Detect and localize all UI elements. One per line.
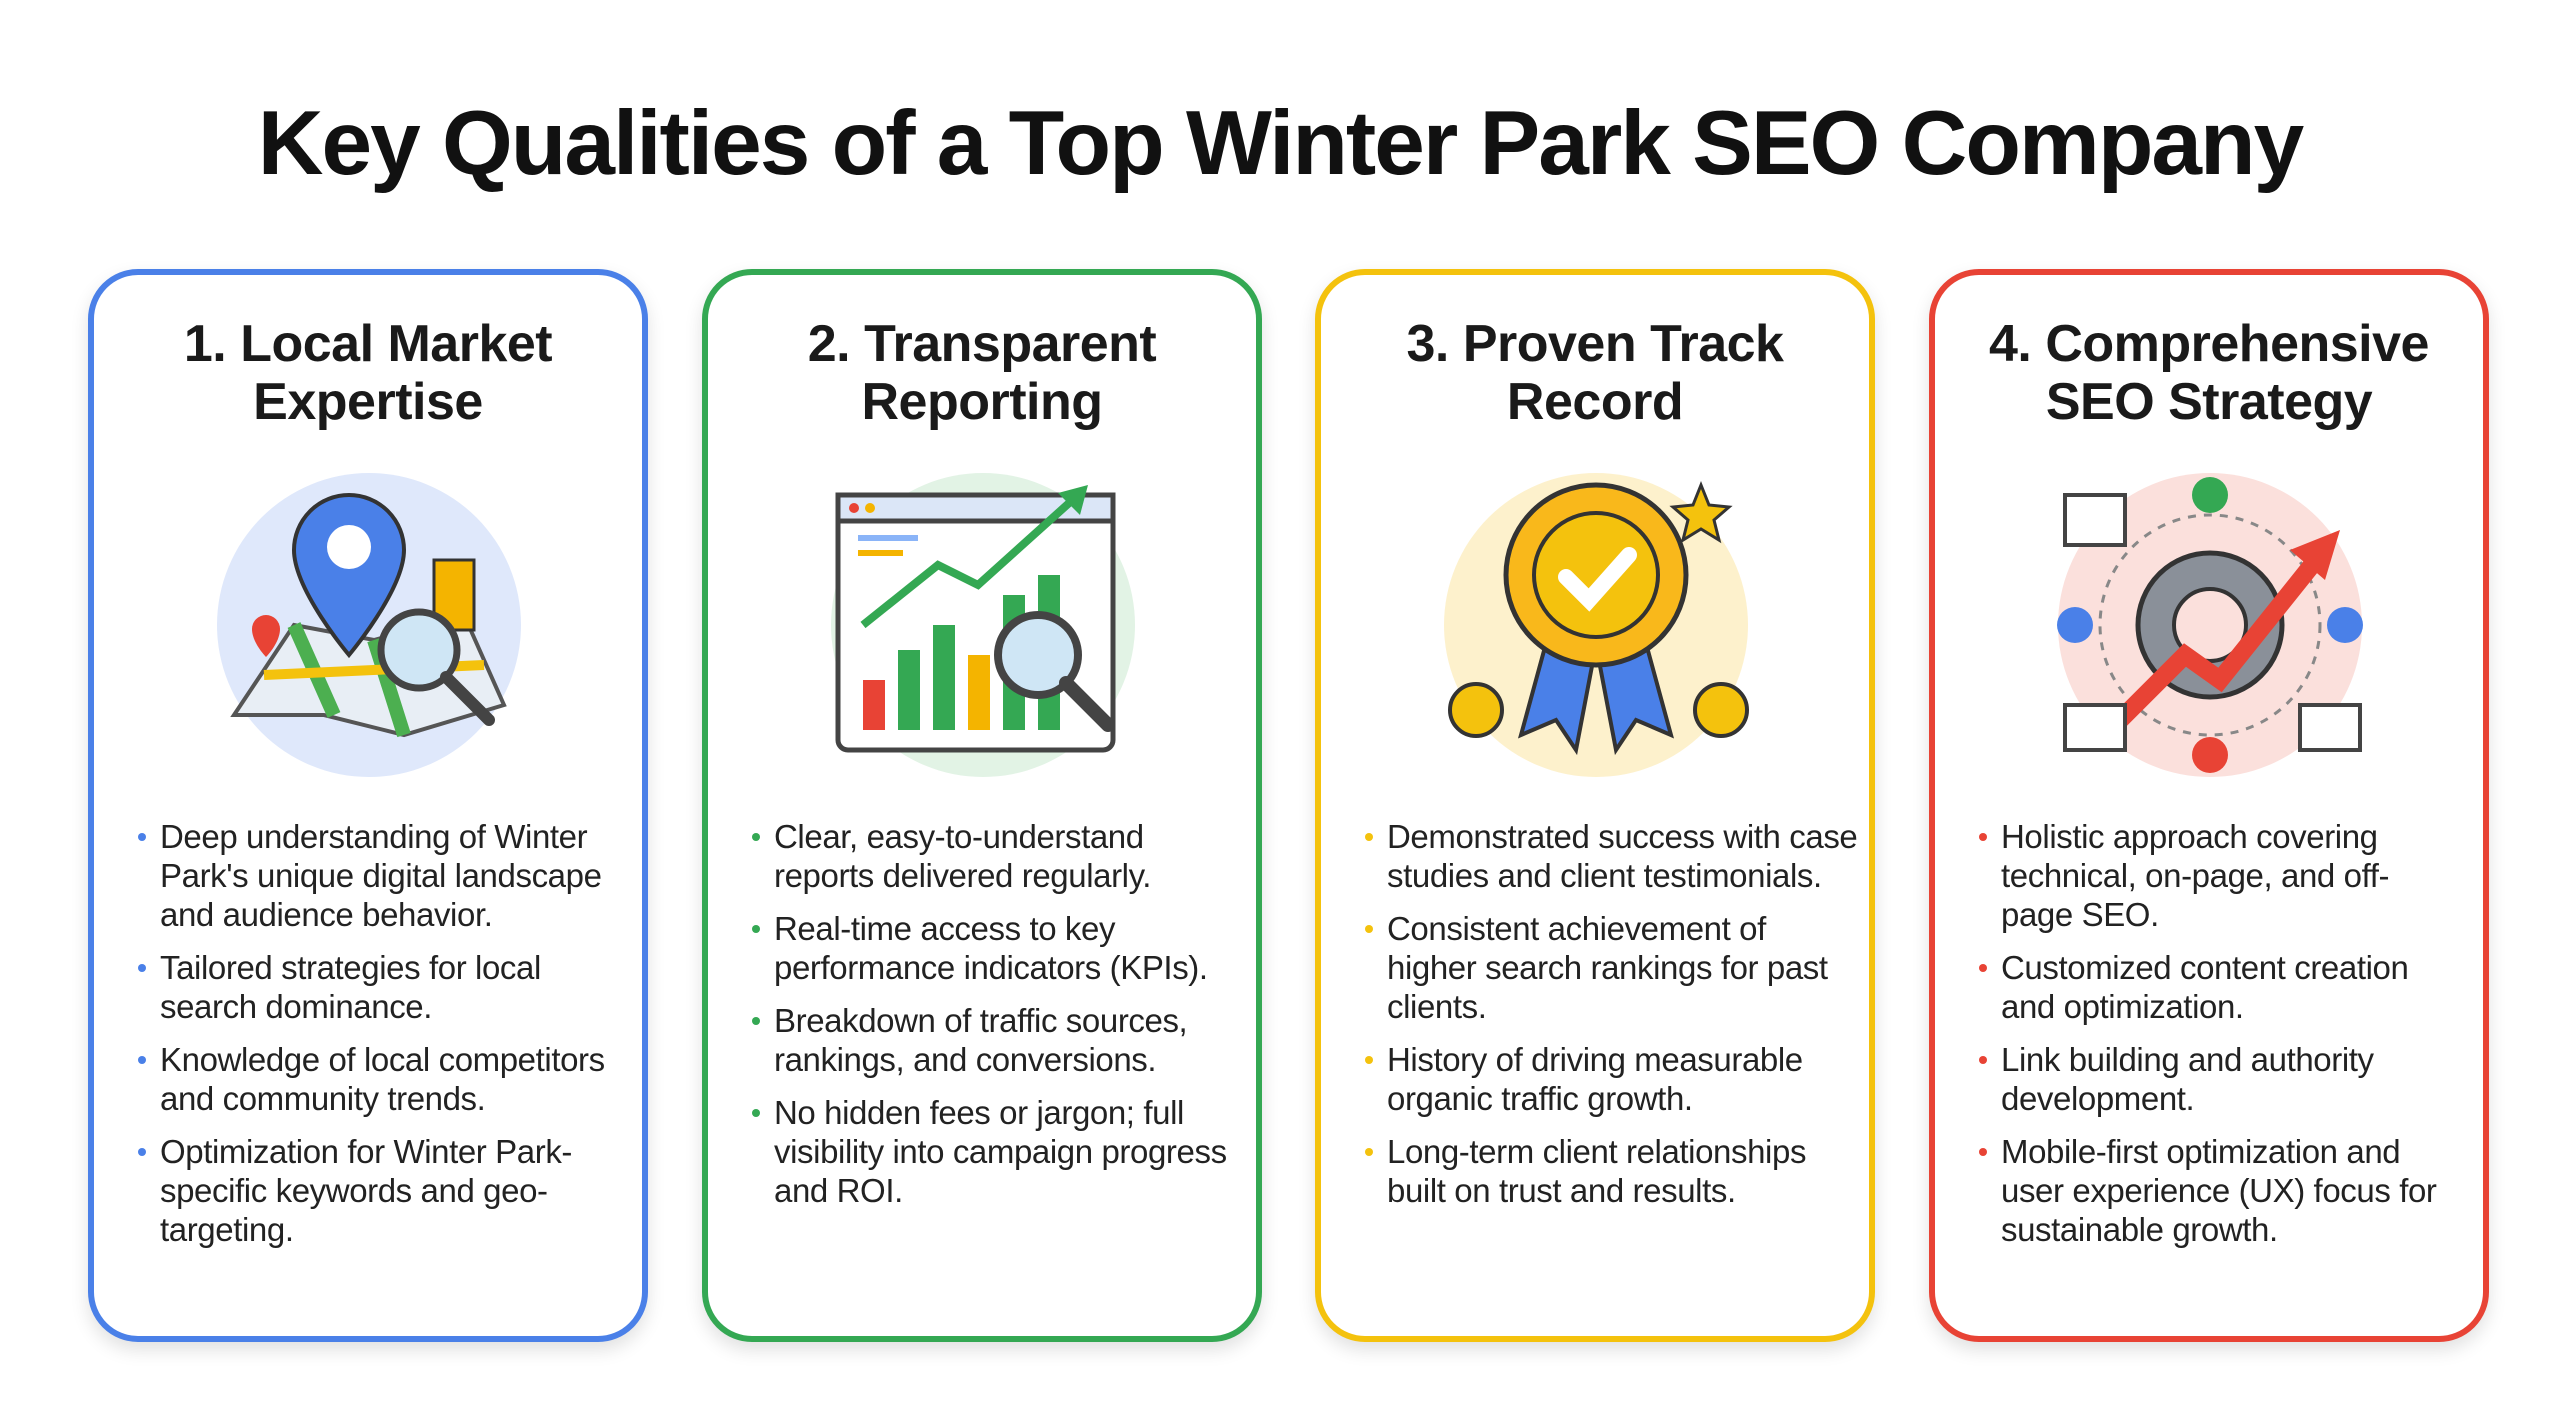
heading: [1407, 315, 1784, 431]
bullet list: user experience (UX) focus for: [2001, 1172, 2437, 1209]
bullet list: Deep understanding of Winter: [160, 818, 587, 855]
heading: [184, 315, 552, 431]
bullet list: Optimization for Winter Park-: [160, 1133, 572, 1170]
bullet list: Link building and authority: [2001, 1041, 2374, 1078]
bullet list: Tailored strategies for local: [160, 949, 541, 986]
bullet list: Long-term client relationships: [1387, 1133, 1806, 1170]
bullet list: targeting.: [160, 1211, 294, 1248]
bullet list: sustainable growth.: [2001, 1211, 2278, 1248]
bullet list: History of driving measurable: [1387, 1041, 1803, 1078]
bullet list: reports delivered regularly.: [774, 857, 1151, 894]
bullet list: [138, 818, 605, 1248]
heading: Expertise: [253, 373, 483, 431]
bullet list: search dominance.: [160, 988, 432, 1025]
bullet list: Clear, easy-to-understand: [774, 818, 1144, 855]
bullet list: Mobile-first optimization and: [2001, 1133, 2400, 1170]
bullet list: built on trust and results.: [1387, 1172, 1736, 1209]
bullet list: and ROI.: [774, 1172, 903, 1209]
bullet list: Knowledge of local competitors: [160, 1041, 605, 1078]
panel: proven track record: [1315, 269, 1875, 1342]
heading: SEO Strategy: [2046, 373, 2372, 431]
bullet list: technical, on-page, and off-: [2001, 857, 2389, 894]
bullet list: organic traffic growth.: [1387, 1080, 1693, 1117]
heading: [808, 315, 1156, 431]
bullet list: clients.: [1387, 988, 1487, 1025]
heading: Record: [1507, 373, 1683, 431]
title: Key Qualities of a Top Winter Park SEO Company: [258, 93, 2302, 194]
heading: 3. Proven Track: [1407, 315, 1783, 373]
bullet list: No hidden fees or jargon; full: [774, 1094, 1184, 1131]
icon: award badge: [1444, 473, 1749, 777]
bullet list: Breakdown of traffic sources,: [774, 1002, 1187, 1039]
bullet list: visibility into campaign progress: [774, 1133, 1227, 1170]
panel: local market expertise: [88, 269, 648, 1342]
bullet list: studies and client testimonials.: [1387, 857, 1822, 894]
bullet list: and community trends.: [160, 1080, 485, 1117]
bullet list: Real-time access to key: [774, 910, 1115, 947]
icon: map pin: [217, 473, 521, 777]
bullet list: performance indicators (KPIs).: [774, 949, 1208, 986]
bullet list: [752, 818, 1227, 1209]
icon: gear with arrow: [2057, 473, 2363, 777]
heading: [1989, 315, 2429, 431]
bullet list: higher search rankings for past: [1387, 949, 1828, 986]
bullet list: and audience behavior.: [160, 896, 492, 933]
bullet list: Consistent achievement of: [1387, 910, 1766, 947]
heading: 4. Comprehensive: [1989, 315, 2429, 373]
panel: comprehensive seo strategy: [1929, 269, 2489, 1342]
bullet list: rankings, and conversions.: [774, 1041, 1156, 1078]
bullet list: development.: [2001, 1080, 2194, 1117]
heading: Reporting: [861, 373, 1103, 431]
bullet list: and optimization.: [2001, 988, 2244, 1025]
heading: 2. Transparent: [808, 315, 1156, 373]
bullet list: page SEO.: [2001, 896, 2159, 933]
bullet list: Demonstrated success with case: [1387, 818, 1857, 855]
bullet list: [1979, 818, 2437, 1248]
bullet list: specific keywords and geo-: [160, 1172, 548, 1209]
bullet list: [1365, 818, 1857, 1209]
bullet list: Customized content creation: [2001, 949, 2408, 986]
panel: transparent reporting: [702, 269, 1262, 1342]
heading: 1. Local Market: [184, 315, 552, 373]
bullet list: Holistic approach covering: [2001, 818, 2378, 855]
icon: chart report: [831, 473, 1135, 777]
bullet list: Park's unique digital landscape: [160, 857, 602, 894]
